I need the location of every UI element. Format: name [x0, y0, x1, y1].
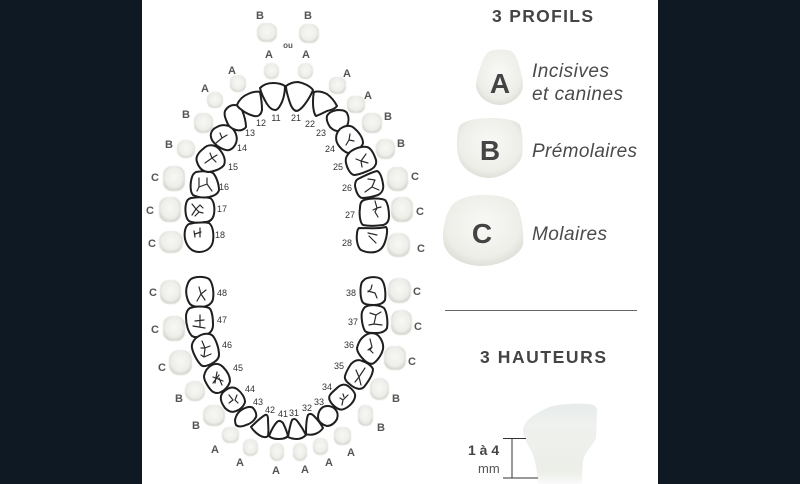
lower tooth numbers: 37: [348, 317, 358, 327]
upper crown profiles: [159, 23, 413, 257]
upper letters: B: [384, 111, 392, 123]
lower tooth numbers: 42: [265, 405, 275, 415]
lower letters: C: [413, 286, 421, 298]
panel: upper arch: [146, 10, 425, 257]
upper letters: C: [411, 171, 419, 183]
heading: 3 profils: 3 PROFILS: [492, 6, 593, 26]
label: 1 a 4: 1 à 4: [468, 442, 499, 458]
tooth 43: [235, 407, 256, 426]
lower letters: A: [236, 457, 244, 469]
upper letters: B: [304, 10, 312, 22]
upper letters: A: [302, 49, 310, 61]
lower tooth numbers: 43: [253, 397, 263, 407]
tooth 32: [306, 414, 323, 435]
lower letters: B: [392, 393, 400, 405]
upper tooth numbers: 27: [345, 210, 355, 220]
upper tooth numbers: 28: [342, 238, 352, 248]
lower letters: A: [301, 464, 309, 476]
upper tooth numbers: 15: [228, 162, 238, 172]
heading: 3 hauteurs: 3 HAUTEURS: [480, 347, 606, 367]
upper letters: C: [416, 206, 424, 218]
tooth 33: [318, 406, 338, 426]
lower tooth numbers: 44: [245, 384, 255, 394]
profile C: [443, 195, 608, 266]
letter A: A: [490, 68, 510, 99]
label: premolaires: Prémolaires: [532, 141, 638, 162]
upper tooth numbers: [215, 113, 355, 248]
lower tooth numbers: 46: [222, 340, 232, 350]
letter B: B: [480, 135, 500, 166]
label: mm: mm: [478, 461, 500, 476]
lower tooth numbers: 34: [322, 382, 332, 392]
tooth 13: [225, 105, 246, 130]
lower letters: B: [175, 393, 183, 405]
tooth 12: [237, 92, 262, 116]
upper tooth numbers: 14: [237, 143, 247, 153]
lower tooth numbers: 47: [217, 315, 227, 325]
lower letters: B: [377, 422, 385, 434]
upper letters: A: [228, 65, 236, 77]
upper tooth numbers: 12: [256, 118, 266, 128]
upper tooth numbers: 16: [219, 182, 229, 192]
tooth 11: [260, 83, 285, 110]
lower tooth numbers: 31: [289, 408, 299, 418]
upper tooth numbers: 23: [316, 128, 326, 138]
lower tooth numbers: [217, 288, 358, 419]
lower letters: B: [192, 420, 200, 432]
label: incisives et canines: Incisives: [532, 61, 610, 82]
lower tooth numbers: 35: [334, 361, 344, 371]
lower letters: A: [347, 447, 355, 459]
lower letters: C: [151, 324, 159, 336]
lower letters: C: [408, 356, 416, 368]
icon: tooth C: [443, 195, 523, 266]
upper tooth numbers: 21: [291, 113, 301, 123]
lower tooth numbers: 38: [346, 288, 356, 298]
upper letters: B: [182, 109, 190, 121]
lower letters: C: [149, 287, 157, 299]
upper letters: [146, 10, 425, 255]
upper letters: C: [151, 172, 159, 184]
lower crown profiles: [160, 278, 412, 461]
upper letters: B: [256, 10, 264, 22]
lower letters: C: [414, 321, 422, 333]
upper tooth numbers: 26: [342, 183, 352, 193]
dimension bracket: [503, 438, 538, 478]
lower letters: A: [211, 444, 219, 456]
profile B: [457, 118, 638, 178]
upper letters: A: [364, 90, 372, 102]
upper tooth numbers: 17: [217, 204, 227, 214]
upper tooth outlines: [185, 82, 389, 252]
lower letters: C: [158, 362, 166, 374]
upper letters: A: [265, 49, 273, 61]
icon: tooth A: [476, 50, 523, 105]
lower tooth numbers: 45: [233, 363, 243, 373]
upper tooth numbers: 11: [271, 113, 281, 123]
panel: lower arch: [149, 277, 422, 477]
upper tooth numbers: 22: [305, 119, 315, 129]
upper letters: B: [397, 138, 405, 150]
upper tooth numbers: 13: [245, 128, 255, 138]
tooth 22: [313, 92, 337, 116]
tooth 23: [327, 110, 348, 131]
upper tooth numbers: 18: [215, 230, 225, 240]
upper letters: C: [148, 238, 156, 250]
lower letters: A: [325, 457, 333, 469]
label: incisives et canines: et canines: [532, 84, 624, 105]
lower tooth outlines: [186, 277, 387, 439]
upper letters: ou: [283, 41, 293, 50]
lower tooth numbers: 32: [302, 403, 312, 413]
lower tooth numbers: 36: [344, 340, 354, 350]
upper letters: A: [201, 83, 209, 95]
height diagram: [468, 404, 597, 484]
upper tooth numbers: 25: [333, 162, 343, 172]
upper letters: A: [343, 68, 351, 80]
lower letters: A: [272, 465, 280, 477]
icon: tooth B: [457, 118, 523, 178]
lower letters: [149, 286, 422, 477]
upper letters: B: [165, 139, 173, 151]
letter C: C: [472, 218, 492, 249]
upper letters: C: [146, 205, 154, 217]
label: molaires: Molaires: [532, 224, 608, 245]
lower tooth numbers: 48: [217, 288, 227, 298]
tooth 21: [286, 82, 313, 111]
tooth 42: [251, 415, 268, 437]
upper tooth numbers: 24: [325, 144, 335, 154]
profile A: [476, 50, 624, 105]
tooth 31: [288, 419, 306, 439]
lower tooth numbers: 41: [278, 409, 288, 419]
white page panel: [142, 0, 658, 484]
upper letters: C: [417, 243, 425, 255]
lower tooth numbers: 33: [314, 397, 324, 407]
icon: abutment: [523, 404, 597, 484]
tooth 41: [269, 421, 288, 439]
